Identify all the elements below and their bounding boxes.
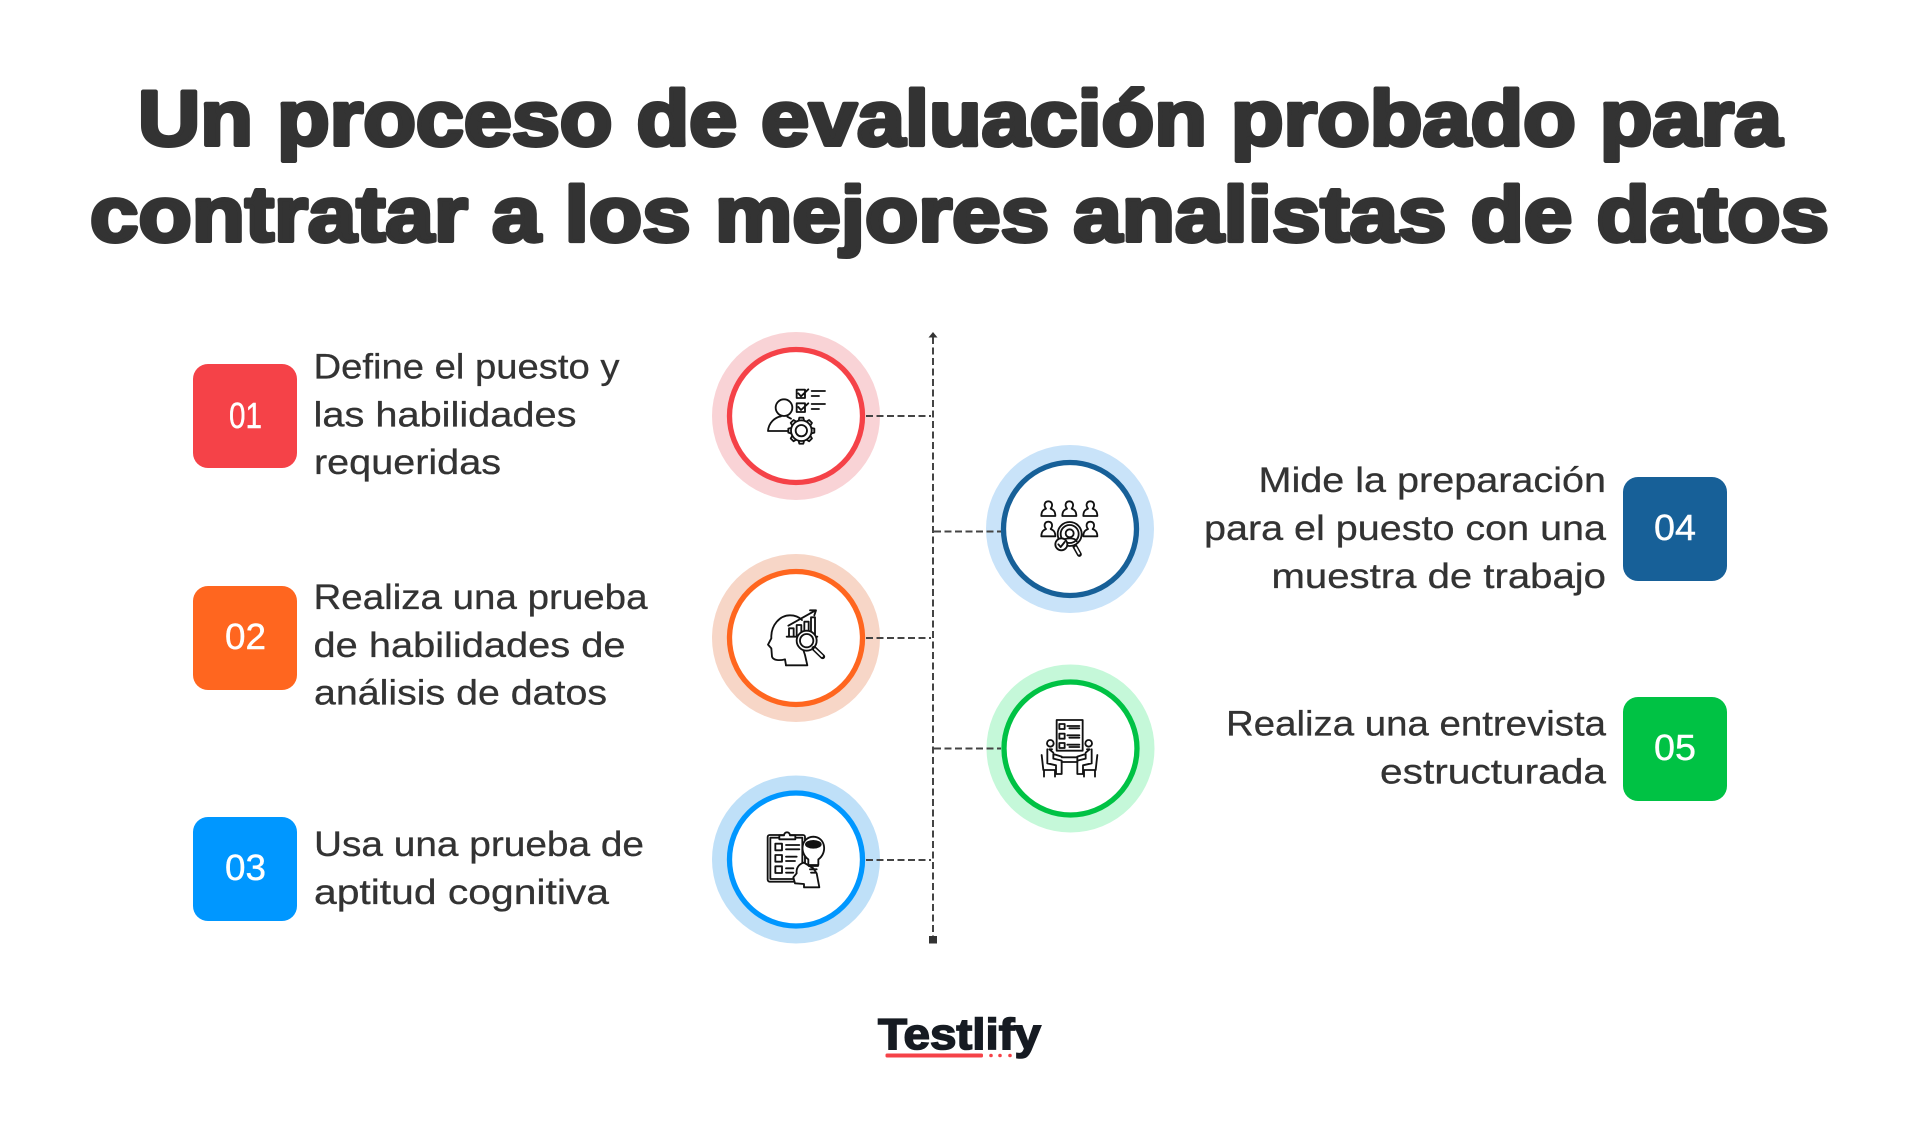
text step 1 [314, 348, 620, 482]
badge 04 [1623, 477, 1727, 581]
title [90, 74, 1829, 258]
text step 1: requeridas [314, 443, 501, 482]
badge 05 [1623, 697, 1727, 801]
title: Un proceso de evaluación probado para [138, 74, 1783, 162]
title: contratar a los mejores analistas de datos [90, 170, 1829, 258]
text step 5: estructurada [1380, 752, 1607, 792]
badge 04: 04 [1654, 507, 1696, 548]
text step 3 [314, 825, 644, 912]
badge 01 [193, 364, 297, 468]
panel: circle halos [712, 332, 1154, 944]
badge 02: 02 [225, 616, 266, 657]
ring 4 [1004, 462, 1136, 596]
step 2 [193, 572, 862, 712]
icon: head with chart and magnifier [768, 610, 823, 665]
text step 2: análisis de datos [314, 674, 607, 712]
logo: Testlify: Testlify [878, 1010, 1042, 1059]
text step 5 [1226, 704, 1607, 792]
text step 4 [1204, 461, 1607, 596]
text step 2 [314, 578, 648, 712]
step 4 [1004, 461, 1727, 596]
icon: person with checklist and gear [768, 389, 825, 444]
badge 01: 01 [229, 395, 262, 436]
step 3 [193, 793, 862, 926]
timeline axis with connectors [866, 332, 1001, 944]
step 5 [1004, 682, 1727, 815]
step 1 [193, 348, 862, 482]
badge 03 [193, 817, 297, 921]
text step 4: Mide la preparación [1258, 461, 1606, 500]
text step 5: Realiza una entrevista [1226, 704, 1607, 744]
ring 3 [730, 793, 862, 926]
ring 2 [730, 572, 862, 704]
text step 3: Usa una prueba de [314, 825, 644, 864]
text step 4: muestra de trabajo [1272, 557, 1606, 596]
text step 2: de habilidades de [314, 626, 626, 665]
text step 1: las habilidades [314, 396, 576, 434]
text step 4: para el puesto con una [1204, 509, 1607, 548]
icon: candidates under magnifier [1041, 501, 1097, 554]
badge 05: 05 [1654, 727, 1696, 768]
ring 5 [1004, 682, 1137, 815]
badge 02 [193, 586, 297, 690]
badge 03: 03 [225, 847, 266, 888]
icon: clipboard with head and light bulb [768, 832, 824, 887]
text step 3: aptitud cognitiva [314, 873, 610, 912]
text step 1: Define el puesto y [314, 348, 620, 386]
icon: structured interview at table [1042, 720, 1097, 777]
ring 1 [730, 350, 862, 482]
text step 2: Realiza una prueba [314, 578, 648, 617]
